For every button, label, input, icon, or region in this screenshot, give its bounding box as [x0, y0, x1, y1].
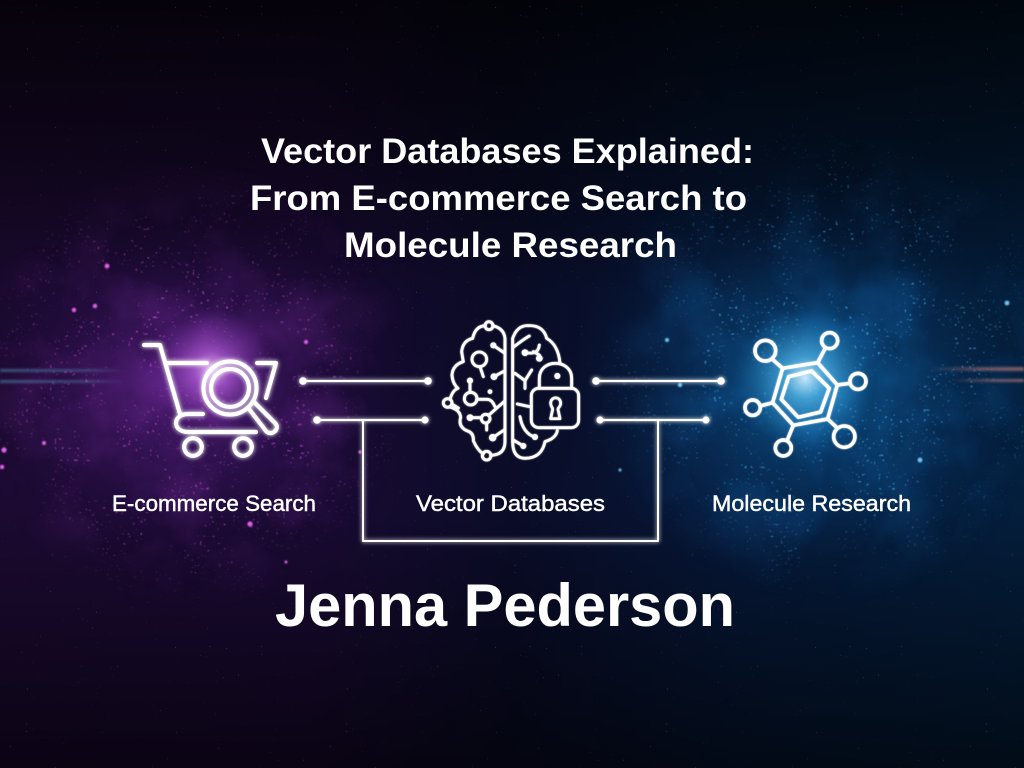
title — [250, 132, 754, 265]
icon: brain with circuit nodes and padlock — [443, 322, 579, 460]
icon: shopping cart with magnifying glass — [144, 345, 277, 456]
author name: Jenna Pederson — [275, 572, 735, 639]
connector lines between icons — [299, 377, 725, 541]
label: Vector Databases: Vector Databases — [416, 491, 605, 516]
icon: hexagonal molecule — [745, 333, 866, 456]
title: Vector Databases Explained: — [261, 132, 754, 171]
title: From E-commerce Search to — [250, 179, 747, 218]
label: Molecule Research: Molecule Research — [712, 491, 911, 516]
title: Molecule Research — [344, 226, 677, 265]
label: E-commerce Search: E-commerce Search — [112, 491, 316, 516]
